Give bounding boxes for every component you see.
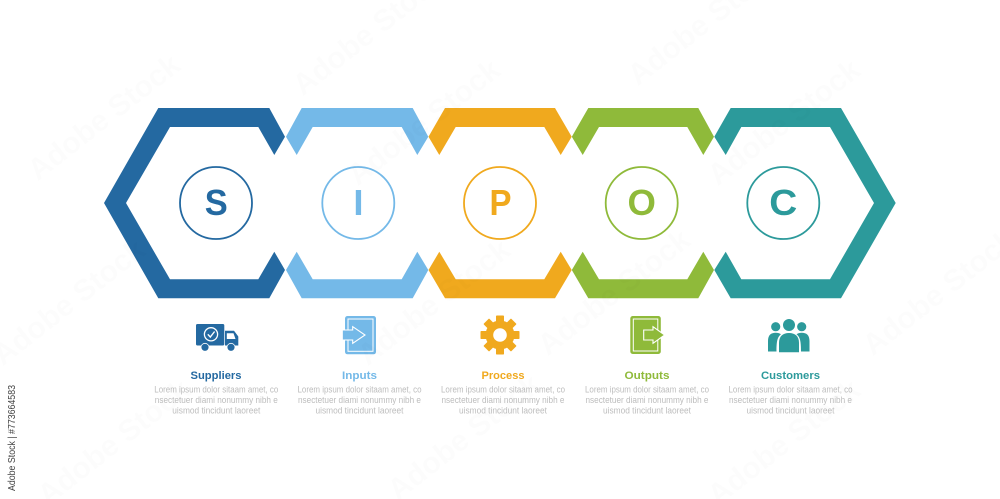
text block: inputs description: uismod tincidunt laoreet bbox=[316, 405, 404, 415]
watermark: stock photo overlay: Adobe Stock bbox=[702, 53, 867, 192]
heading: Outputs: Outputs bbox=[624, 370, 670, 382]
badge: C: C bbox=[769, 182, 797, 223]
badge: P: P bbox=[490, 182, 512, 223]
panel: inputs frame bbox=[286, 108, 428, 298]
text block: inputs description bbox=[298, 385, 422, 415]
text block: inputs description: Lorem ipsum dolor sitaam amet, co bbox=[298, 385, 422, 395]
badge: S bbox=[180, 167, 252, 239]
text block: outputs description: Lorem ipsum dolor sitaam amet, co bbox=[585, 385, 709, 395]
side label: Adobe Stock id: Adobe Stock | #773664583 bbox=[7, 385, 18, 491]
watermark: stock photo overlay: Adobe Stock bbox=[342, 53, 507, 192]
icon: customers group bbox=[768, 319, 810, 352]
text block: process description: uismod tincidunt laoreet bbox=[459, 405, 547, 415]
text block: outputs description bbox=[585, 385, 709, 415]
text block: customers description: uismod tincidunt laoreet bbox=[746, 405, 835, 415]
badge: O bbox=[606, 167, 678, 239]
text block: outputs description: uismod tincidunt laoreet bbox=[603, 405, 691, 415]
panel: suppliers hexagon frame bbox=[104, 108, 285, 298]
heading: Customers: Customers bbox=[761, 370, 820, 382]
text block: process description: nsectetuer diami nonummy nibh e bbox=[442, 395, 564, 405]
text block: outputs description: nsectetuer diami nonummy nibh e bbox=[586, 395, 708, 405]
panel: outputs frame bbox=[572, 108, 714, 298]
text block: suppliers description: Lorem ipsum dolor sitaam amet, co bbox=[154, 385, 278, 395]
icon: input door bbox=[342, 316, 376, 354]
icon: delivery truck bbox=[196, 324, 238, 351]
text block: suppliers description: uismod tincidunt laoreet bbox=[172, 405, 261, 415]
text block: process description bbox=[441, 385, 565, 415]
text block: suppliers description: nsectetuer diami nonummy nibh e bbox=[155, 395, 278, 405]
text block: suppliers description bbox=[154, 385, 278, 415]
badge: S: S bbox=[205, 182, 228, 223]
watermark: stock photo overlay: Adobe Stock bbox=[532, 223, 697, 362]
text block: process description: Lorem ipsum dolor sitaam amet, co bbox=[441, 385, 565, 395]
heading: Process: Process bbox=[482, 370, 524, 382]
badge: I bbox=[322, 167, 394, 239]
badge: C bbox=[747, 167, 819, 239]
heading: Inputs: Inputs bbox=[342, 370, 377, 382]
text block: customers description: Lorem ipsum dolor sitaam amet, co bbox=[728, 385, 852, 395]
text block: customers description: nsectetuer diami nonummy nibh e bbox=[729, 395, 852, 405]
badge: P bbox=[464, 167, 536, 239]
text block: inputs description: nsectetuer diami nonummy nibh e bbox=[298, 395, 421, 405]
watermark: stock photo overlay: Adobe Stock bbox=[22, 48, 187, 187]
heading: Suppliers: Suppliers bbox=[190, 370, 242, 382]
panel: customers hexagon frame bbox=[714, 108, 896, 298]
panel: process frame bbox=[428, 108, 572, 298]
watermark: stock photo overlay: Adobe Stock bbox=[352, 233, 517, 372]
icon: gear bbox=[480, 316, 520, 354]
badge: O: O bbox=[627, 182, 656, 223]
badge: I: I bbox=[353, 182, 364, 223]
text block: customers description bbox=[728, 385, 852, 415]
icon: output door bbox=[630, 316, 665, 354]
